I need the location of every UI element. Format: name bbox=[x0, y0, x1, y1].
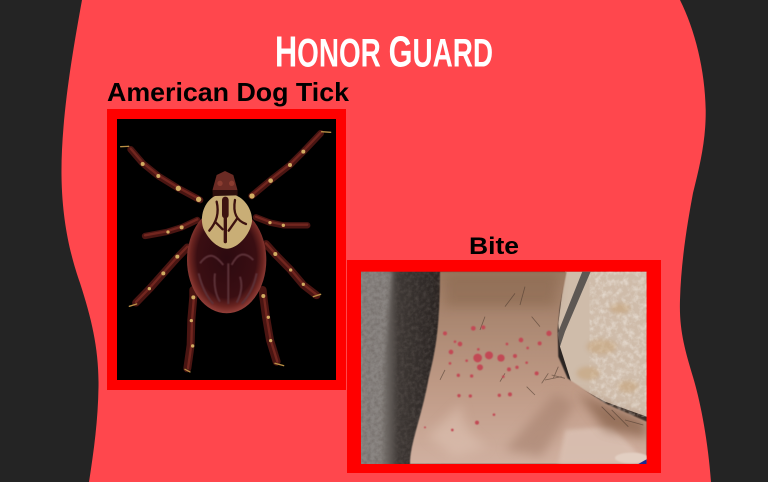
leg hair bbox=[440, 287, 643, 427]
shield bbox=[202, 195, 252, 249]
title: HONOR GUARD bbox=[275, 28, 493, 76]
leg highlights bbox=[131, 133, 321, 368]
heading: American Dog Tick: American Dog Tick bbox=[107, 77, 350, 107]
bite marks bbox=[424, 325, 552, 431]
head bbox=[213, 171, 237, 197]
leg and foot bbox=[410, 272, 648, 464]
panel: bite photo bbox=[347, 260, 661, 473]
photo backdrop: wall bbox=[361, 272, 647, 464]
tarsus tips bbox=[121, 132, 331, 372]
panel: tick photo bbox=[107, 109, 346, 390]
legs bbox=[131, 133, 321, 368]
shield markings bbox=[209, 200, 246, 242]
floor tile bbox=[558, 272, 647, 417]
abdomen markings bbox=[199, 255, 257, 304]
leg joints bbox=[141, 150, 305, 348]
abdomen bbox=[187, 207, 266, 313]
illustration: tick bbox=[121, 132, 331, 372]
heading: Bite: Bite bbox=[469, 233, 519, 260]
